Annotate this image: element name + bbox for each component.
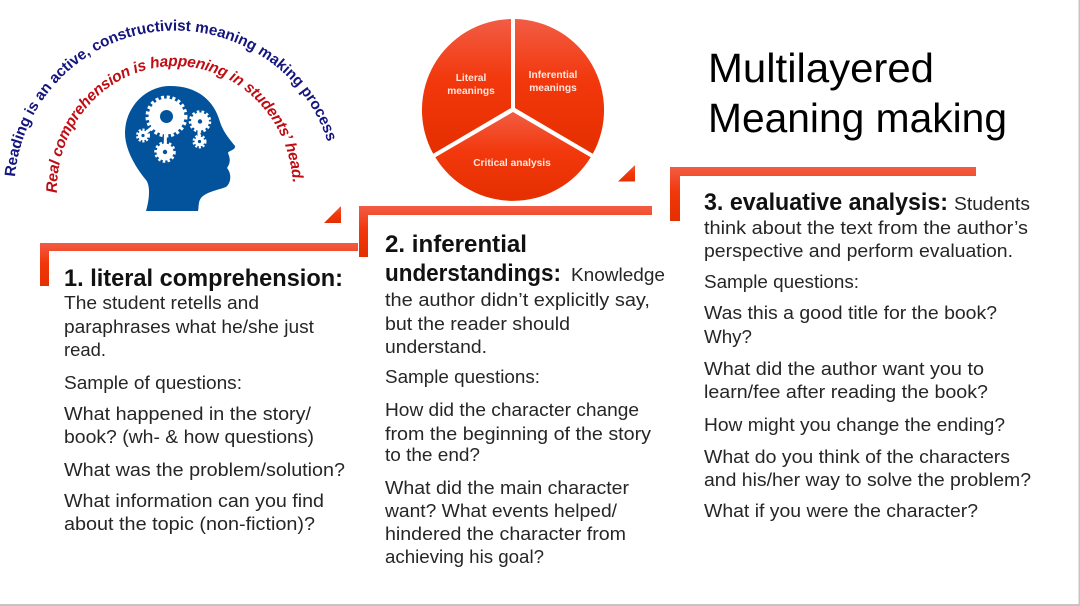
sample questions 3: What did the author want you to <box>704 358 984 379</box>
sample questions 2: How did the character change <box>385 399 639 420</box>
slice: critical analysis: Critical analysis <box>473 158 551 169</box>
column 3: evaluative analysis <box>704 189 1031 521</box>
heading 2: understandings: <box>385 260 561 287</box>
heading 2 <box>385 231 561 287</box>
slice: inferential meanings: meanings <box>529 83 577 94</box>
sample questions 3: learn/fee after reading the book? <box>704 381 988 402</box>
curved caption: real comprehension: Real comprehension is happening in students’ head. <box>46 56 304 193</box>
sample questions 3: What if you were the character? <box>704 500 978 521</box>
sample questions 3: Sample questions: <box>704 271 859 292</box>
sample questions 1 <box>64 372 345 534</box>
sample questions 3: and his/her way to solve the problem? <box>704 469 1031 490</box>
description 2 <box>385 264 665 357</box>
description 3 <box>704 193 1030 261</box>
sample questions 3: What do you think of the characters <box>704 446 1010 467</box>
description 3: perspective and perform evaluation. <box>704 240 1013 261</box>
sample questions 1: book? (wh- & how questions) <box>64 426 314 447</box>
title: Multilayered <box>708 45 934 91</box>
column 1: literal comprehension <box>64 265 345 534</box>
slice: inferential meanings <box>515 19 604 154</box>
sample questions 1: about the topic (non-fiction)? <box>64 513 315 534</box>
sample questions 2: What did the main character <box>385 477 629 498</box>
heading 1: 1. literal comprehension: <box>64 265 343 292</box>
pie diagram: three meanings <box>422 19 604 201</box>
sample questions 1: Sample of questions: <box>64 372 242 393</box>
description 3: Students <box>954 193 1030 214</box>
description 1: read. <box>64 339 106 360</box>
sample questions 2: from the beginning of the story <box>385 423 652 444</box>
icon: head with gears <box>125 86 235 211</box>
arrow corner triangle 2 <box>618 165 635 182</box>
slice: literal meanings: meanings <box>447 86 495 97</box>
sample questions 1: What information can you find <box>64 490 324 511</box>
description 1: The student retells and <box>64 292 259 313</box>
slice: critical analysis <box>435 112 591 201</box>
description 2: the author didn’t explicitly say, <box>385 289 650 310</box>
heading 3: 3. evaluative analysis: <box>704 189 948 216</box>
heading 2: 2. inferential <box>385 231 527 258</box>
title: Meaning making <box>708 95 1007 141</box>
sample questions 2: Sample questions: <box>385 366 540 387</box>
sample questions 3: Why? <box>704 326 752 347</box>
curved caption: reading is an active process: Reading is an active, constructivist meaning making process <box>4 20 334 176</box>
description 1: paraphrases what he/she just <box>64 316 314 337</box>
sample questions 3: How might you change the ending? <box>704 414 1005 435</box>
description 2: understand. <box>385 336 487 357</box>
sample questions 2: achieving his goal? <box>385 546 544 567</box>
sample questions 1: What was the problem/solution? <box>64 459 345 480</box>
description 2: but the reader should <box>385 313 570 334</box>
column 2: inferential understandings <box>384 231 665 567</box>
sample questions 2: want? What events helped/ <box>384 500 618 521</box>
description 1 <box>64 292 314 360</box>
slice: inferential meanings: Inferential <box>529 70 578 81</box>
description 3: think about the text from the author’s <box>704 217 1028 238</box>
sample questions 3 <box>704 271 1031 521</box>
step bracket 3 <box>670 167 976 221</box>
step bracket 2 <box>359 206 652 257</box>
slice: literal meanings <box>422 19 511 154</box>
sample questions 1: What happened in the story/ <box>64 403 312 424</box>
step bracket 1 <box>40 243 358 286</box>
arrow corner triangle 1 <box>324 206 341 223</box>
sample questions 2: hindered the character from <box>385 523 626 544</box>
sample questions 2 <box>384 366 652 567</box>
slice: literal meanings: Literal <box>456 73 486 84</box>
title <box>708 45 1007 141</box>
sample questions 2: to the end? <box>385 444 480 465</box>
sample questions 3: Was this a good title for the book? <box>704 302 997 323</box>
description 2: Knowledge <box>571 264 665 285</box>
